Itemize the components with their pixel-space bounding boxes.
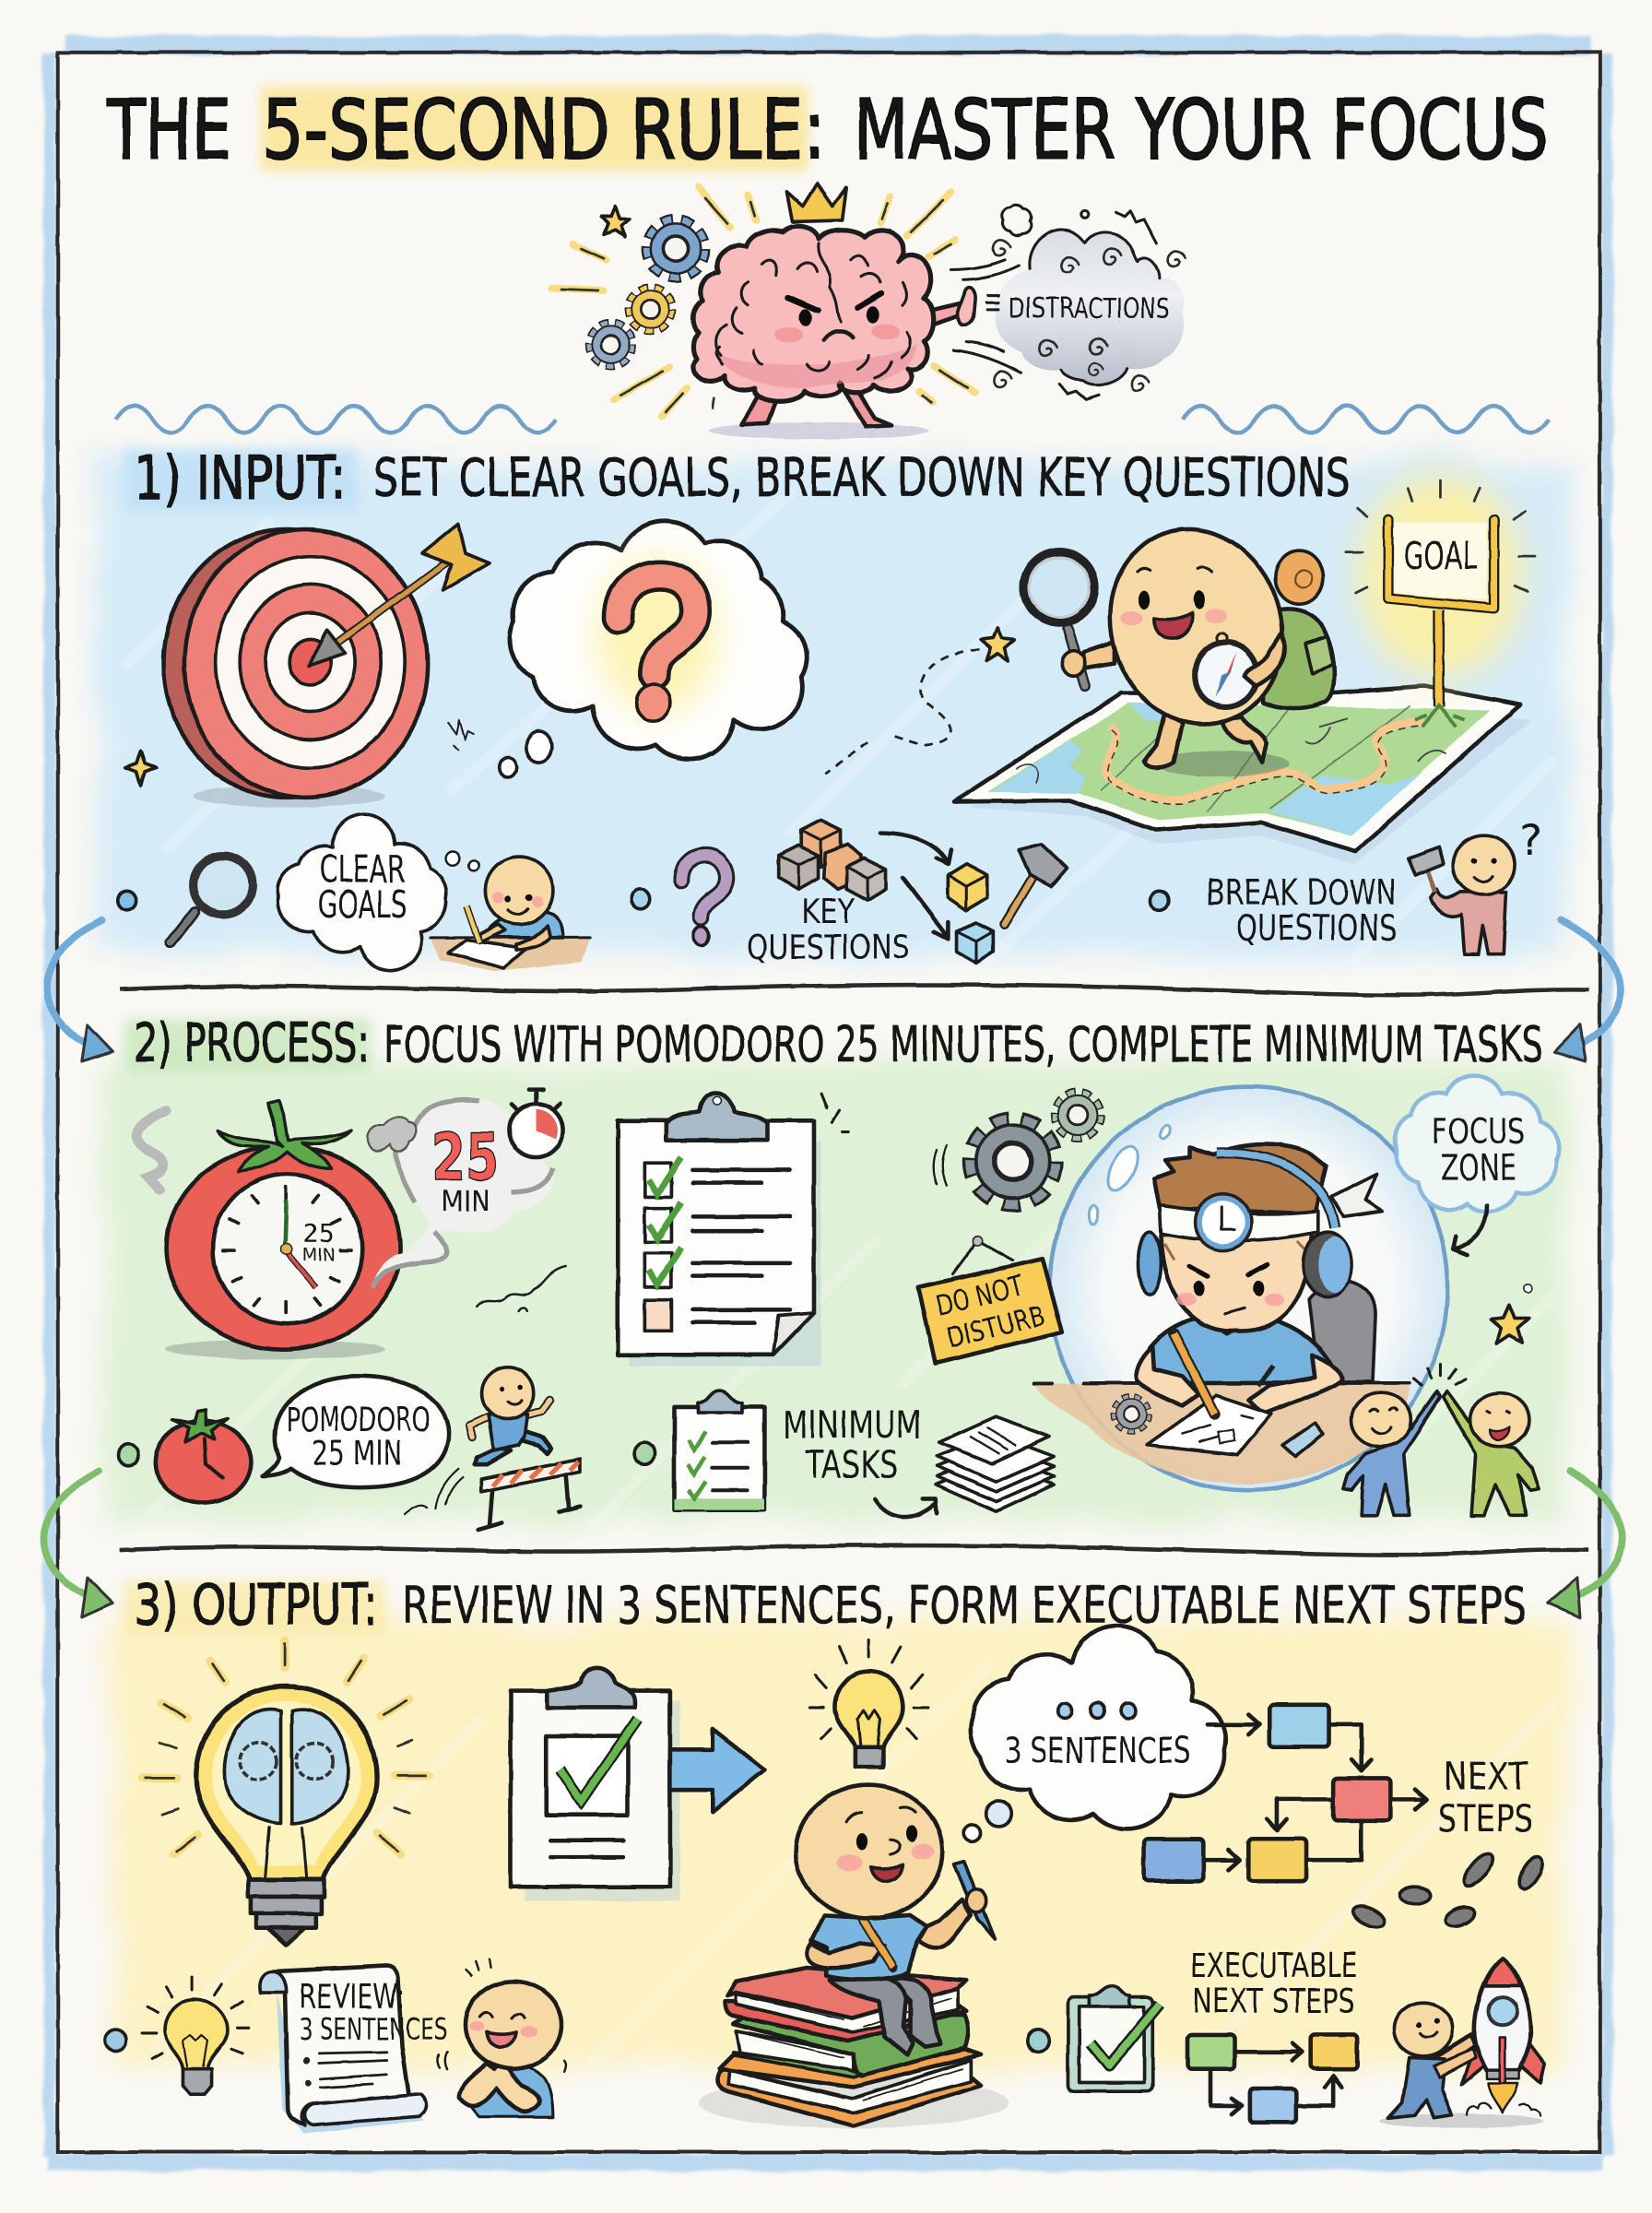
heading: process: 2) PROCESS: [134, 1012, 370, 1074]
bullet [105, 2030, 126, 2052]
head [796, 1785, 942, 1918]
title: 5-SECOND RULE: [263, 83, 825, 178]
icon: do not disturb sign [918, 1236, 1062, 1364]
book green [737, 2030, 854, 2075]
section 3 header [134, 1573, 1527, 1639]
text: break down: BREAK DOWN [1206, 872, 1397, 914]
text: 25 min bubble: 25 [431, 1120, 500, 1196]
arrow: input right [1554, 920, 1620, 1061]
rows [644, 1157, 790, 1331]
icon: small bulb [143, 1977, 248, 2094]
row 1 item: key questions: QUESTIONS [747, 927, 910, 966]
icon: scroll: 3 SENTENCES [299, 2012, 447, 2047]
section streak texture [127, 494, 1552, 2060]
icon: map with path [953, 686, 1532, 864]
icon: person and rocket [1380, 1959, 1545, 2128]
right arm [1245, 633, 1285, 686]
arms [1137, 1346, 1199, 1405]
icon: 3 sentences thought cloud [963, 1627, 1226, 1841]
icon: focus bubble with kid [1034, 1087, 1447, 1490]
icon: hurdle [405, 1460, 580, 1530]
heading: output: 3) OUTPUT: [134, 1573, 378, 1639]
icon: distraction cloud [950, 206, 1185, 399]
text: do not disturb: DO NOT [933, 1271, 1027, 1323]
icon: paper stack [936, 1417, 1054, 1511]
row 1 item: break down questions [1150, 816, 1542, 954]
legs [891, 1978, 941, 2046]
character: explorer egg [1024, 506, 1334, 776]
text: minimum tasks: MINIMUM [783, 1403, 922, 1448]
icon: check clipboard [1068, 1985, 1160, 2091]
arrow: process left [43, 1471, 112, 1617]
arm left [1080, 643, 1115, 669]
page lines [742, 1998, 962, 2100]
paper [1147, 1396, 1271, 1455]
icon: high five friends [1343, 1365, 1540, 1516]
section washes [96, 460, 1570, 2069]
output header highlight [124, 1580, 385, 1634]
heading: input: 1) INPUT: [134, 444, 346, 513]
icon: brain character [693, 226, 975, 426]
text: clear goals: CLEAR [320, 847, 406, 892]
icon: trail star [981, 628, 1014, 660]
bullet [1150, 891, 1169, 910]
small spark [125, 751, 157, 787]
body [1085, 506, 1307, 747]
section 1 header [134, 444, 1351, 513]
process header highlight [124, 1019, 371, 1072]
icon: rays [551, 186, 974, 417]
character: thinker on books [699, 1785, 1009, 2128]
icon: happy person [438, 1959, 566, 2117]
row 2 item: pomodoro [119, 1367, 580, 1530]
book red [726, 2001, 966, 2041]
bullet [1028, 2030, 1049, 2052]
icon: mini clipboard [674, 1391, 764, 1510]
icon: smoke cloud with timer [367, 1090, 566, 1311]
arrows [1203, 1715, 1426, 1870]
divider [120, 1545, 1588, 1555]
bullet [118, 891, 136, 910]
icon: clipboard with arrow [511, 1667, 764, 1901]
headband [1160, 1205, 1317, 1241]
shadow [1154, 751, 1290, 776]
icon: tomato timer [136, 1101, 401, 1359]
icon: scroll [260, 1966, 447, 2134]
icon: magnifier [171, 912, 195, 942]
text: next steps: NEXT [1444, 1755, 1528, 1799]
headphones [1216, 1153, 1335, 1228]
arms [808, 1943, 885, 1968]
flowchart: next steps: STEPS [1437, 1797, 1533, 1841]
shirt [811, 1915, 926, 1980]
text: do not disturb [933, 1267, 1048, 1356]
bullet [119, 1444, 138, 1466]
icon: large checklist clipboard [618, 1093, 848, 1367]
icon: writing kid [431, 857, 590, 971]
icon: tomato timer: MIN [302, 1246, 335, 1265]
icon: target with arrow [125, 524, 490, 808]
icon: star [601, 207, 630, 237]
desk [1034, 1383, 1410, 1485]
chair [1309, 1281, 1375, 1381]
shadow [699, 2077, 1009, 2128]
wash: output [112, 1617, 1566, 2069]
bubble highlights [1089, 1124, 1172, 1225]
text: key questions: KEY [801, 892, 856, 931]
icon: smoke cloud with timer: MIN [441, 1186, 490, 1218]
title [107, 83, 1549, 178]
arrow: process right [1548, 1471, 1622, 1617]
text: clock label: 25 [303, 1219, 335, 1249]
text: pomodoro: POMODORO [287, 1400, 431, 1439]
bullet [631, 889, 650, 909]
row 3 item: executable next steps [1028, 1946, 1545, 2128]
row 1 item: key questions [631, 820, 1067, 966]
face [1189, 1264, 1267, 1276]
hair [1154, 1144, 1326, 1213]
icon: hammer person [1408, 816, 1542, 954]
cloud [277, 814, 446, 971]
arrows [880, 833, 948, 937]
shirt [1150, 1317, 1338, 1383]
icon: rays [143, 1641, 429, 1854]
text: distractions: DISTRACTIONS [1009, 293, 1170, 325]
row 2 item: minimum tasks [635, 1391, 1054, 1517]
green friend [1444, 1391, 1540, 1516]
bullet [635, 1442, 655, 1465]
eraser [1282, 1423, 1323, 1457]
heading: input subtitle: SET CLEAR GOALS, BREAK DOWN KEY QUESTIONS [374, 447, 1351, 508]
head [1161, 1228, 1312, 1331]
wavy divider right [1182, 406, 1549, 432]
icon: hammer person: ? [1519, 816, 1542, 866]
callout: focus zone [1395, 1076, 1559, 1343]
icon: crown [787, 183, 846, 221]
text: do not disturb: DISTURB [943, 1300, 1048, 1355]
icon: goal signpost [1346, 474, 1535, 727]
divider [120, 985, 1588, 995]
gear [1115, 1399, 1147, 1429]
flowchart: next steps [1144, 1705, 1533, 1881]
text: review: REVIEW: [299, 1977, 405, 2017]
text: goal: GOAL [1404, 534, 1477, 578]
text: 3 sentences: 3 SENTENCES [1005, 1731, 1191, 1772]
icon: big light bulb with brain [143, 1641, 429, 1945]
head clock [1195, 1194, 1251, 1250]
scribble [477, 1266, 566, 1311]
icon: small tomato [155, 1410, 251, 1503]
backpack [1263, 609, 1334, 708]
blue friend [1343, 1391, 1440, 1516]
cubes [948, 864, 987, 910]
ribbon [1332, 1174, 1383, 1216]
row 3 item: executable next steps: NEXT STEPS [1192, 1981, 1356, 2020]
legs [1144, 713, 1182, 767]
section 2 header [134, 1012, 1543, 1074]
arrow: input left [47, 920, 112, 1061]
text: executable: EXECUTABLE [1190, 1946, 1358, 1985]
icon: hammer [1005, 875, 1034, 925]
title: THE [107, 83, 231, 178]
pencil [1174, 1333, 1215, 1414]
icon: blocks [779, 820, 886, 901]
pen [953, 1862, 995, 1939]
magnifier [1068, 628, 1085, 686]
wash: process [104, 1061, 1566, 1521]
row 1 item: clear goals: GOALS [318, 882, 407, 927]
icon: question thought cloud [500, 521, 807, 777]
pencil [856, 1908, 893, 1967]
dashed trail [825, 649, 979, 774]
brain shadow [708, 422, 928, 439]
hero: brain blocking distractions [551, 183, 1185, 439]
row 1 item: break down questions: QUESTIONS [1236, 907, 1397, 949]
row 2 item: minimum tasks: TASKS [805, 1442, 899, 1486]
input header highlight [124, 449, 357, 511]
bedroll [1275, 550, 1323, 604]
icon: purple question [681, 856, 726, 946]
scribble [449, 720, 474, 750]
row 1 item: clear goals [118, 814, 590, 971]
icon: footprints [1350, 1850, 1547, 1931]
book orange [717, 2065, 981, 2125]
title highlight [261, 87, 808, 171]
icon: gears [934, 1095, 1098, 1200]
icon: gears [592, 222, 702, 364]
row 2 item: pomodoro: 25 MIN [312, 1434, 402, 1473]
wavy divider left [115, 406, 556, 432]
flow [1188, 2035, 1234, 2069]
icon: small idea bulb [809, 1639, 928, 1767]
text: focus zone: FOCUS [1432, 1111, 1525, 1153]
row 3 item: review [105, 1959, 566, 2134]
icon: runner [470, 1367, 551, 1465]
speech bubble [263, 1376, 449, 1487]
callout: focus zone: ZONE [1440, 1148, 1516, 1189]
wash: input [96, 460, 1570, 954]
compass [1217, 633, 1227, 643]
